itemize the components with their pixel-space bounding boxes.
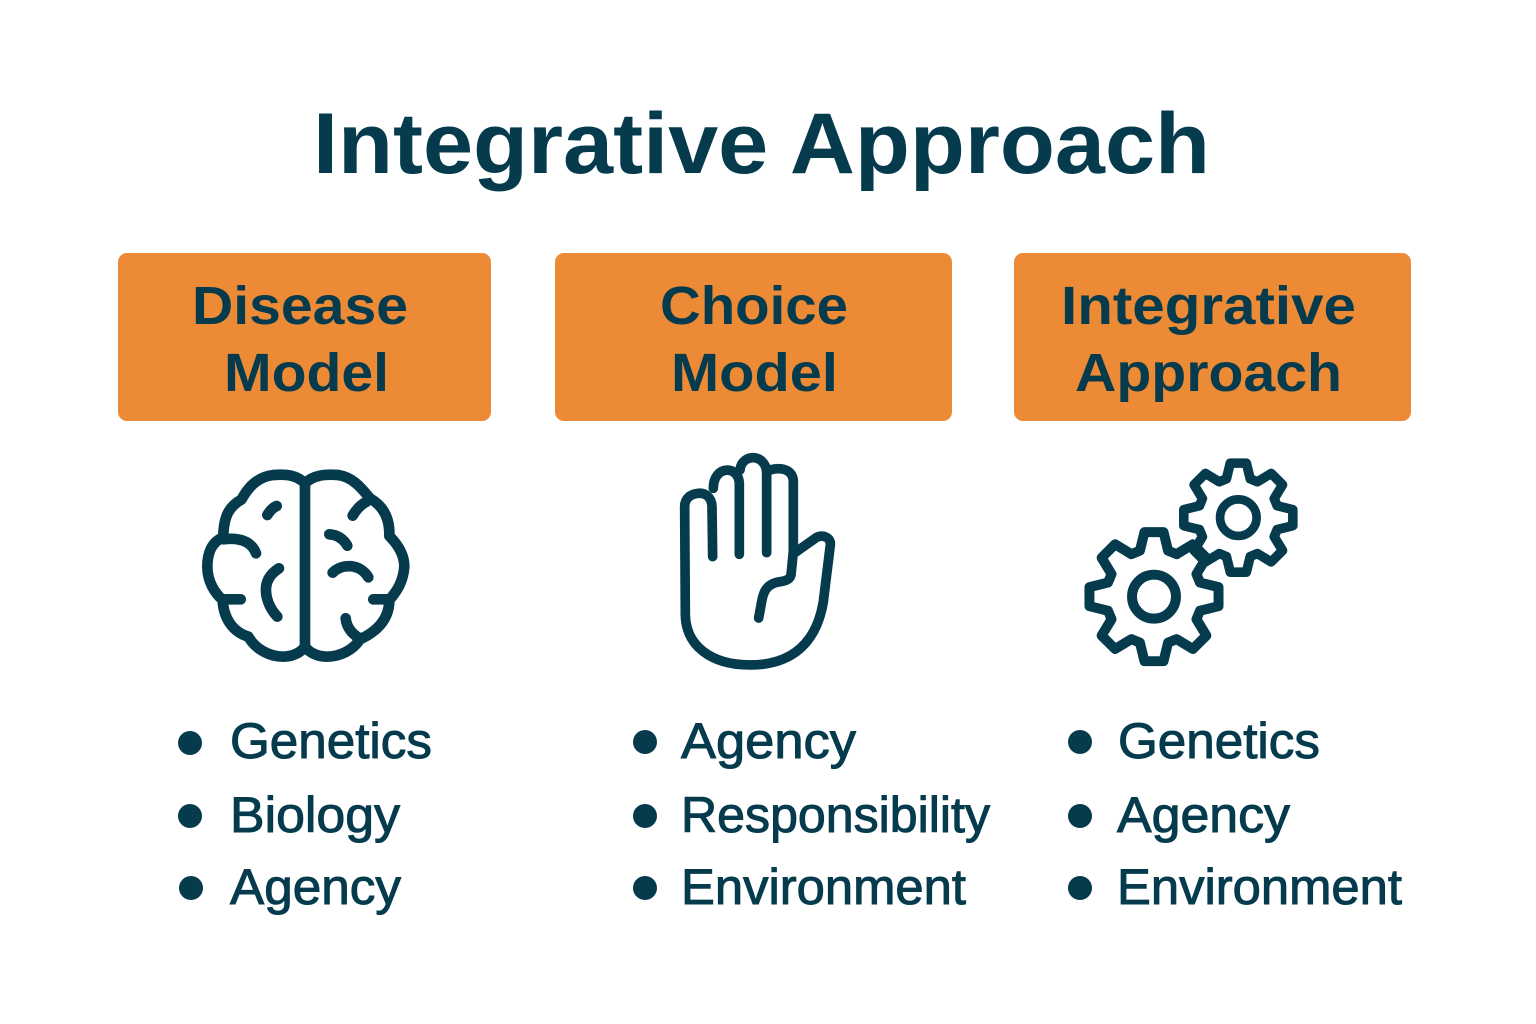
bullet list: integrative approach: Agency: [1117, 787, 1290, 843]
bullet list: choice model: Responsibility: [681, 787, 990, 843]
header box: disease model: [118, 253, 491, 421]
bullet list: choice model: Environment: [681, 859, 966, 915]
heading: choice model: [660, 276, 848, 403]
bullet list: choice model: [633, 713, 990, 915]
heading: choice model: Choice: [660, 276, 848, 336]
heading: disease model: [192, 276, 408, 403]
icon: brain: [207, 475, 404, 657]
bullet list: integrative approach: Genetics: [1118, 713, 1320, 769]
bullet list: integrative approach: [1068, 713, 1402, 915]
icon: raised hand: [685, 458, 830, 665]
bullet list: integrative approach: Environment: [1117, 859, 1402, 915]
bullet list: disease model: [178, 713, 432, 915]
heading: integrative approach: [1061, 276, 1356, 403]
panel: integrative approach: [1014, 253, 1411, 915]
heading: integrative approach: Approach: [1075, 343, 1342, 403]
panel: choice model: [555, 253, 990, 915]
heading: disease model: Disease: [192, 276, 408, 336]
bullet list: disease model: Agency: [230, 859, 401, 915]
bullet list: disease model: Genetics: [230, 713, 432, 769]
heading: disease model: Model: [224, 343, 389, 403]
icon: gears: [1089, 463, 1293, 661]
bullet list: choice model: Agency: [681, 713, 856, 769]
header box: choice model: [555, 253, 952, 421]
bullet list: disease model: Biology: [230, 787, 400, 843]
heading: integrative approach: Integrative: [1061, 276, 1356, 336]
header box: integrative approach: [1014, 253, 1411, 421]
panel: disease model: [118, 253, 491, 915]
heading: choice model: Model: [671, 343, 838, 403]
title: Integrative Approach: [313, 96, 1210, 192]
